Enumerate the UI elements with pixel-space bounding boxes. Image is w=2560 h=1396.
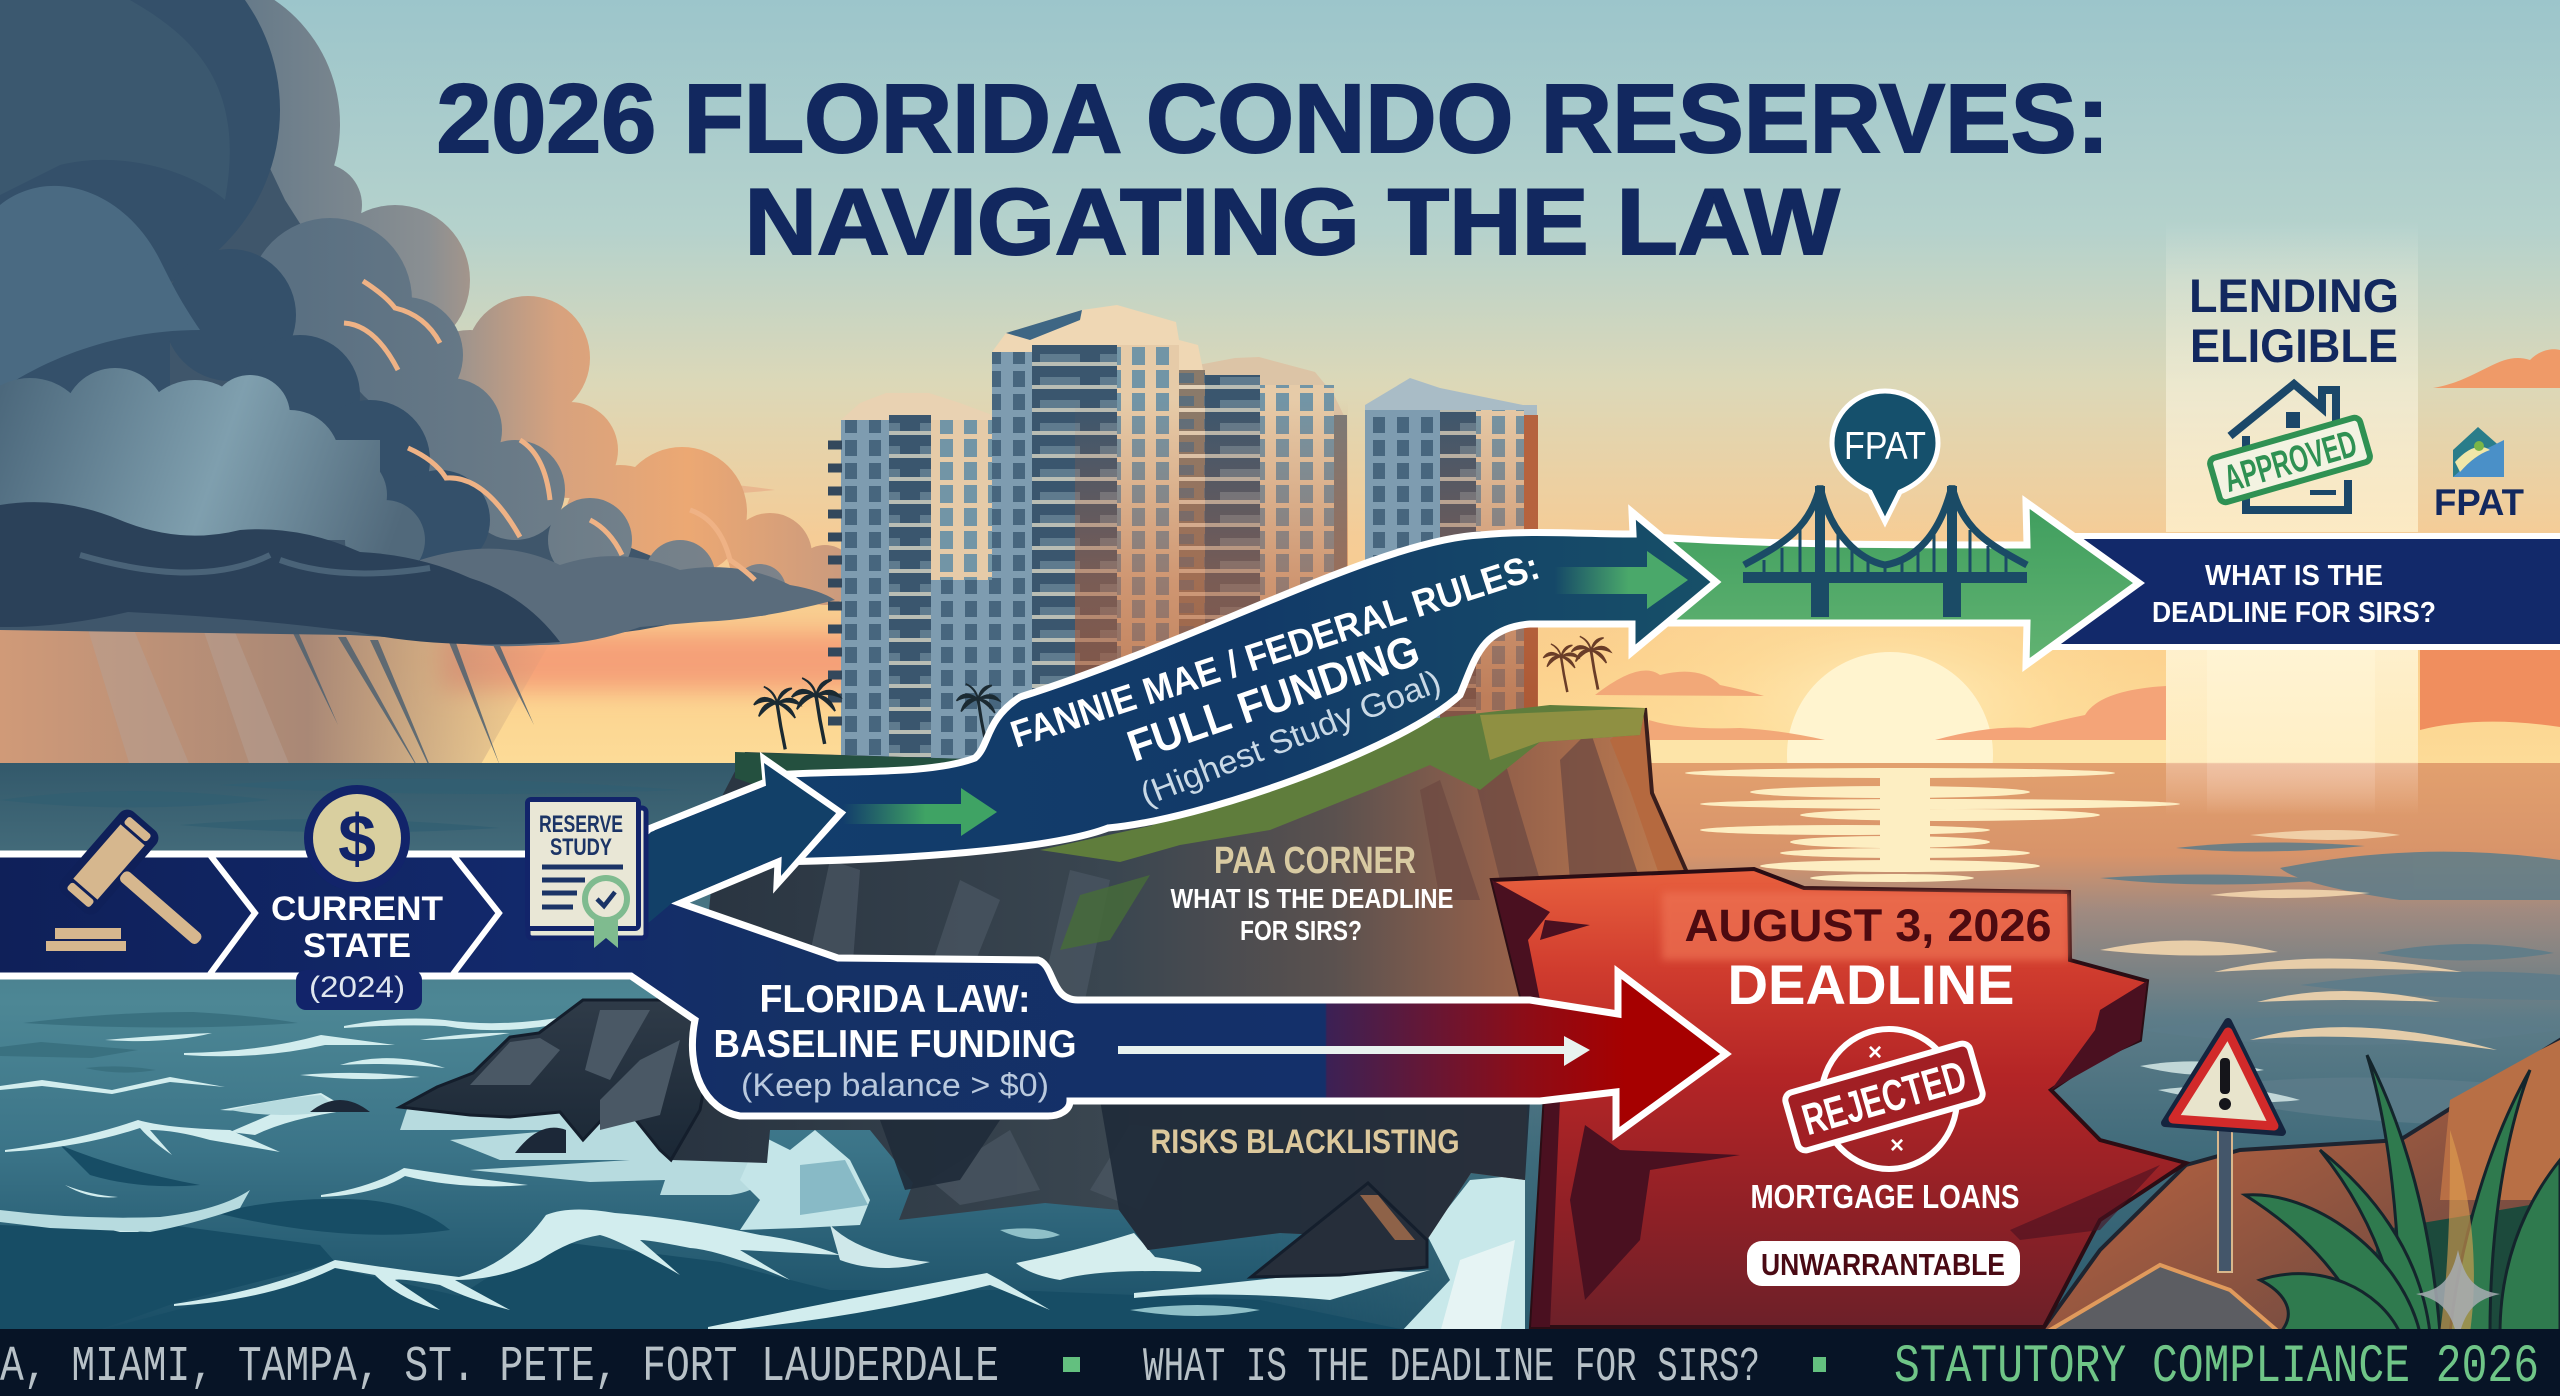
rocky cliff <box>310 636 1689 1277</box>
light foam by the rocks <box>0 1095 770 1232</box>
icon: suspension bridge <box>1743 486 2027 617</box>
icon: reserve study document: RESERVE <box>539 811 623 838</box>
deep water <box>0 1145 1420 1333</box>
glow column below banner <box>2166 650 2418 815</box>
ticker bar <box>0 1329 2560 1396</box>
sea <box>0 763 2560 1333</box>
cracks in the cliff <box>1492 880 2160 1327</box>
icon: reserve study document <box>525 797 646 948</box>
current state step <box>271 785 443 1010</box>
palm trees on cliff <box>754 678 999 749</box>
icon: gavel <box>46 806 235 981</box>
right navy banner with question <box>2054 536 2560 647</box>
ticker bar: WHAT IS THE DEADLINE FOR SIRS? <box>1143 1341 1760 1395</box>
sun reflection <box>1685 768 2180 882</box>
unwarrantable pill: UNWARRANTABLE <box>1761 1247 2005 1282</box>
current state step: (2024) <box>309 971 405 1004</box>
current state step: STATE <box>303 927 411 965</box>
glow column behind lending eligible <box>2166 220 2418 532</box>
Florida law text: FLORIDA LAW: <box>760 978 1030 1021</box>
panel: red deadline cliff <box>1492 869 2186 1327</box>
tower 1 <box>828 393 992 760</box>
cloud upper slate lobe <box>0 186 200 390</box>
FPAT logo <box>2434 427 2524 523</box>
rain shafts <box>0 604 560 790</box>
Fannie Mae text: FANNIE MAE / FEDERAL RULES: <box>1006 546 1545 757</box>
highest study goal text: (Highest Study Goal) <box>1135 662 1446 813</box>
facets <box>800 860 1180 1210</box>
cloud dark core <box>0 0 490 570</box>
icon: house with approved stamp: APPROVED <box>2219 423 2362 501</box>
cloud right tail <box>420 549 835 646</box>
unwarrantable pill <box>1747 1241 2020 1286</box>
cloud rim highlights <box>344 281 755 580</box>
date highlight <box>1662 892 2069 960</box>
green cliff top <box>1040 705 1645 862</box>
right navy banner with question: DEADLINE FOR SIRS? <box>2152 597 2436 629</box>
tower 2 <box>992 305 1205 760</box>
chevrons <box>210 855 499 974</box>
foreground rocks <box>2040 1040 2560 1333</box>
tower 4 <box>1365 378 1538 745</box>
icon: reserve study document: STUDY <box>550 834 612 861</box>
cloud solid base <box>0 0 800 645</box>
arrow: Fannie Mae full funding path <box>770 512 1716 862</box>
splash left of cliff <box>740 1130 870 1230</box>
heading: lending eligible <box>2189 269 2399 372</box>
heading: lending eligible: LENDING <box>2189 269 2399 322</box>
storm cloud with rain <box>0 0 855 790</box>
green bridge arrow <box>1640 502 2139 665</box>
ticker bar: A, MIAMI, TAMPA, ST. PETE, FORT LAUDERDALE <box>0 1339 999 1396</box>
PAA corner note: WHAT IS THE DEADLINE <box>1170 883 1454 914</box>
white foam crests <box>0 1016 840 1310</box>
plant leaves <box>2245 1055 2560 1333</box>
PAA corner note: PAA CORNER <box>1214 840 1416 882</box>
tower 3 <box>1198 357 1348 755</box>
cloud outer lobes <box>40 0 855 605</box>
rejected stamp: × <box>1868 1039 1882 1066</box>
full funding text: FULL FUNDING <box>1121 626 1426 771</box>
warm rock streaks <box>1420 730 1640 900</box>
inner green arrow upper <box>1555 551 1688 609</box>
lower-left rocks <box>400 1000 720 1160</box>
Florida law text <box>714 978 1076 1103</box>
current state step: CURRENT <box>271 890 443 928</box>
icon: FPAT pin <box>1832 391 1938 522</box>
banner text: WHAT IS THE <box>2205 560 2383 592</box>
heading: lending eligible: ELIGIBLE <box>2190 319 2398 372</box>
deadline heading: DEADLINE <box>1728 953 2014 1016</box>
main rock mass <box>650 708 1689 1250</box>
title: 2026 FLORIDA CONDO RESERVES: <box>436 64 2110 173</box>
icon: warning sign <box>2165 1022 2282 1272</box>
rejected stamp <box>1783 1029 1985 1169</box>
icon: dollar coin <box>304 785 410 891</box>
deadline date: AUGUST 3, 2026 <box>1684 900 2052 951</box>
cloud bottom dark band <box>0 502 560 644</box>
PAA corner note <box>1170 840 1454 946</box>
sky background <box>0 0 2560 768</box>
icon: dollar coin: $ <box>338 801 376 877</box>
icon: FPAT pin: FPAT <box>1844 425 1926 468</box>
arrow: current state band and Florida law path <box>0 759 1726 1134</box>
Florida law text: BASELINE FUNDING <box>714 1023 1076 1066</box>
PAA corner note: FOR SIRS? <box>1240 915 1362 946</box>
inner white arrow <box>1118 1036 1590 1066</box>
risks blacklisting label: RISKS BLACKLISTING <box>1150 1123 1460 1161</box>
cloud mid lobes <box>248 218 786 616</box>
sparkle watermark <box>2416 1250 2500 1340</box>
sunset clouds and sun <box>435 349 2560 763</box>
title: NAVIGATING THE LAW <box>744 169 1840 274</box>
rejected stamp: REJECTED <box>1797 1052 1972 1145</box>
left sea dark patches <box>0 779 680 832</box>
right sea waves <box>2100 842 2560 1126</box>
mortgage loans label: MORTGAGE LOANS <box>1750 1178 2020 1215</box>
condo towers <box>828 305 1538 760</box>
cloud front puffs <box>0 368 425 580</box>
cloud top shadow <box>0 0 230 200</box>
inner green arrow lower <box>843 788 997 836</box>
FPAT logo: FPAT <box>2434 482 2524 523</box>
splash right of cliff <box>1400 1175 1525 1333</box>
title <box>436 64 2110 274</box>
central sea swell and splashes <box>708 1130 1525 1333</box>
rejected stamp: × <box>1890 1132 1904 1159</box>
icon: house with approved stamp <box>2209 384 2371 510</box>
Florida law text: (Keep balance > $0) <box>741 1067 1049 1103</box>
boulder <box>1251 1183 1427 1277</box>
year pill <box>296 970 422 1010</box>
